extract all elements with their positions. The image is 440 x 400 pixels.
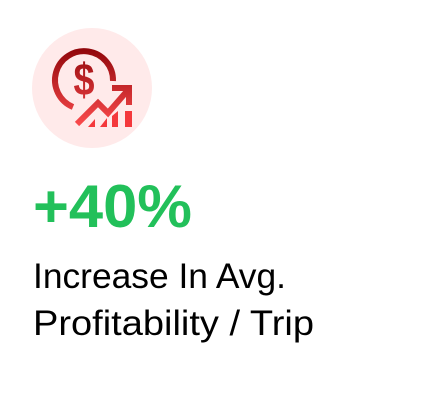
stat value: +40% [33, 173, 192, 240]
description line 1: Increase In Avg. [33, 257, 286, 296]
icon: profit growth [32, 28, 152, 148]
description [33, 257, 314, 343]
icon: growth arrow [77, 88, 129, 124]
icon: coin arc [55, 51, 113, 107]
icon: bars [88, 111, 132, 127]
description line 2: Profitability / Trip [33, 304, 314, 343]
icon background circle [32, 28, 152, 148]
icon: dollar sign: $ [74, 54, 94, 105]
